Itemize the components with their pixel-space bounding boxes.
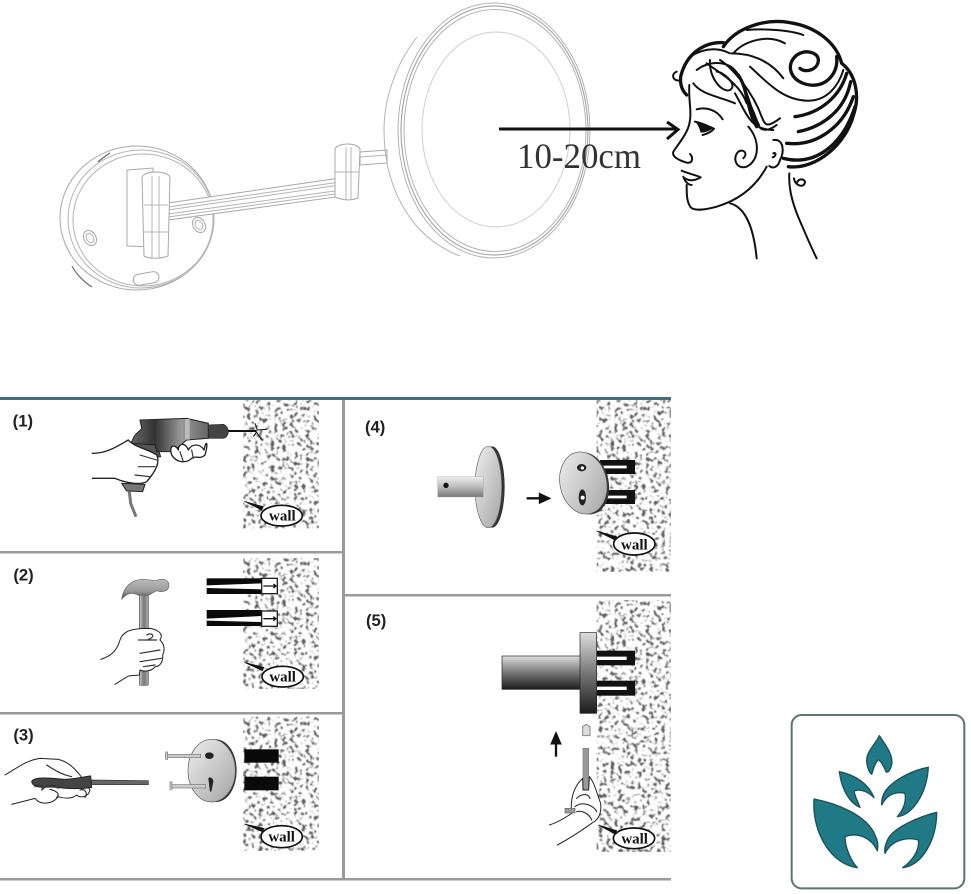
face outline (673, 85, 767, 210)
wall callout: wall (269, 669, 296, 685)
brand logo (792, 715, 964, 888)
set screw (583, 724, 590, 736)
mounted plate (554, 447, 615, 519)
hair bun outline (723, 22, 857, 167)
logo frame (792, 715, 964, 888)
step 5 number: (5) (366, 611, 386, 630)
wall texture (597, 400, 671, 572)
hammer (101, 579, 169, 685)
wall texture (243, 558, 319, 689)
anchors (207, 578, 277, 626)
hex key in hand (549, 748, 601, 845)
wall callout: wall (621, 831, 648, 847)
step 4 panel (365, 400, 671, 572)
step 3 number: (3) (13, 726, 34, 745)
screwdriver in hand (5, 758, 148, 804)
step 1 number: (1) (13, 412, 33, 431)
flange side view (438, 446, 505, 528)
eye and brow (695, 108, 723, 135)
wall callout: wall (268, 830, 295, 846)
mounted arm section (502, 633, 635, 713)
wall texture (243, 400, 319, 528)
ear (769, 140, 783, 167)
wall callout (597, 531, 655, 555)
swing arm (127, 144, 387, 258)
step 3 panel (5, 717, 319, 851)
wall texture (243, 717, 319, 851)
wall plate (60, 146, 214, 290)
magnifying mirror product sketch (60, 3, 590, 290)
wall callout (598, 825, 655, 849)
logo leaves (814, 736, 937, 868)
cheek curl (735, 127, 757, 167)
hair front (681, 43, 723, 95)
step 1 panel (13, 400, 319, 528)
distance label: 10-20cm (517, 136, 641, 176)
step 5 panel (366, 600, 671, 852)
wall plate with screws (166, 739, 237, 802)
instruction grid frame (0, 397, 671, 880)
bun spiral (790, 52, 837, 85)
anchors (600, 460, 635, 504)
arrow up (552, 734, 560, 757)
black wall holes (244, 749, 279, 790)
mirror head (384, 3, 590, 258)
wall texture (597, 600, 671, 852)
wall callout (244, 662, 303, 687)
wall callout (244, 501, 302, 526)
step 4 number: (4) (365, 417, 385, 436)
neck lines (730, 173, 817, 258)
wall callout: wall (621, 537, 648, 553)
wall callout (244, 824, 302, 848)
wall callout: wall (269, 508, 296, 524)
drill (92, 418, 267, 517)
step 2 number: (2) (13, 566, 34, 585)
bun strands (732, 29, 843, 101)
distance arrow (499, 122, 678, 139)
arrow right (527, 494, 549, 502)
step 2 panel (13, 558, 319, 689)
woman face profile (673, 22, 857, 258)
